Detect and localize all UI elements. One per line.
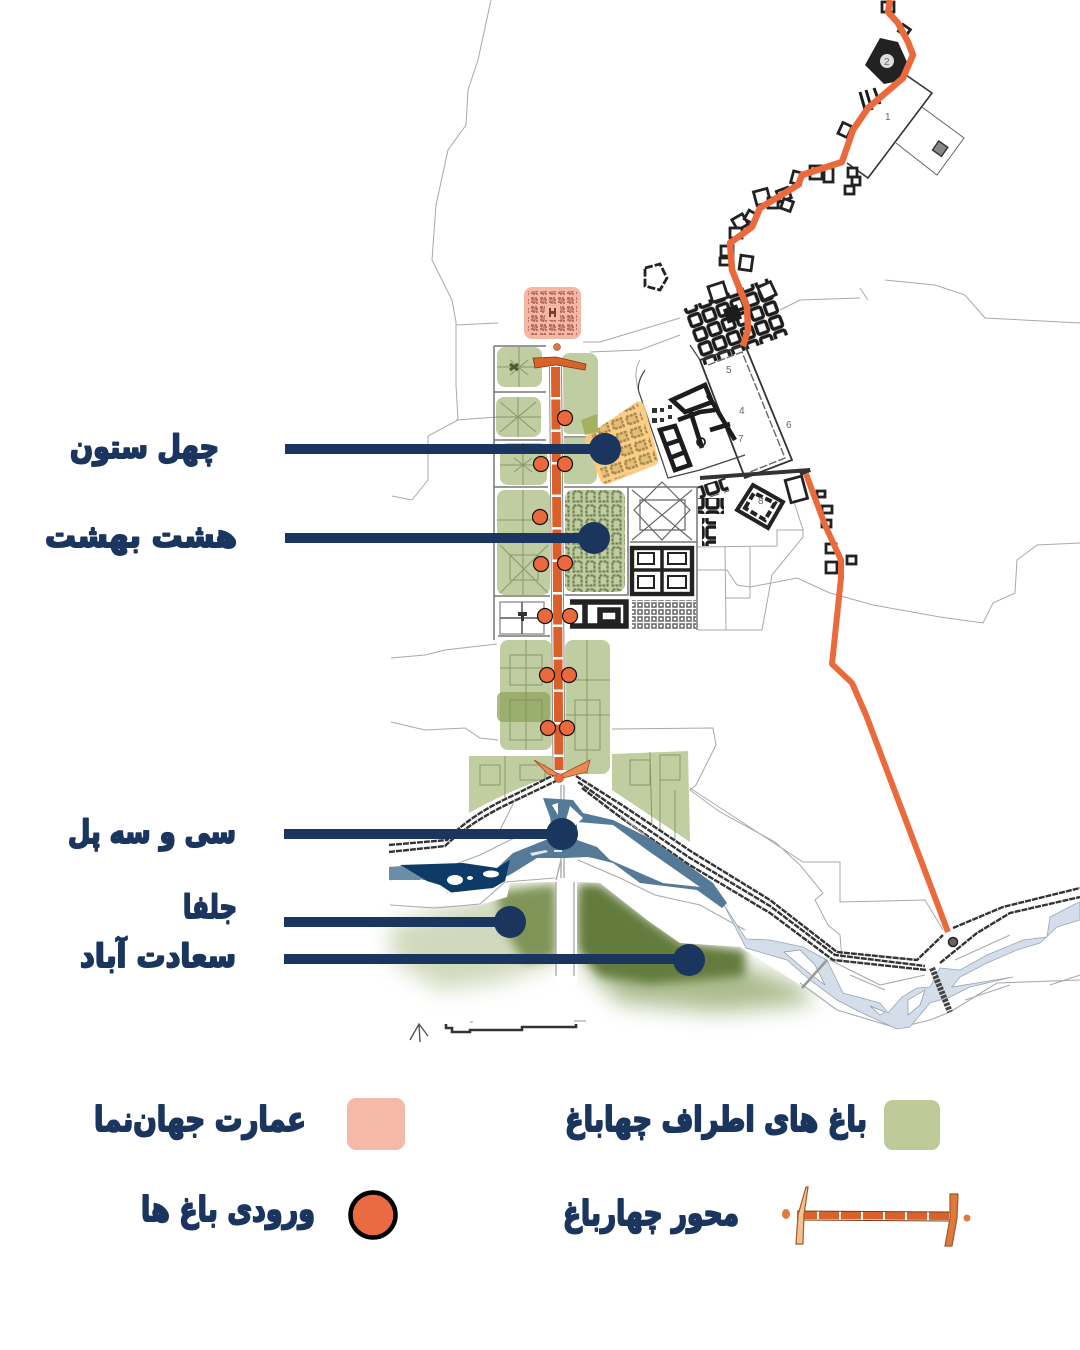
base map line work — [391, 0, 1080, 960]
legend: Jahan-Nama building — [94, 1098, 405, 1150]
embankment lines — [389, 774, 1080, 970]
route: southern orange path — [806, 474, 948, 932]
garden plan details — [480, 347, 680, 840]
river dark blue — [400, 860, 510, 893]
callout: Saadat Abad: سعادت آباد — [80, 936, 236, 975]
central road — [556, 785, 577, 985]
darker garden band — [497, 692, 550, 722]
scale bar — [446, 1021, 586, 1032]
central gardens outline work — [494, 346, 697, 640]
dense parterre of Hasht Behesht garden — [565, 490, 625, 592]
callout: Saadat Abad — [80, 936, 705, 976]
axis south terrace — [534, 760, 590, 778]
river bed white mask — [389, 777, 837, 992]
buildings upper route: 2 — [884, 57, 890, 68]
ground: Saadat Abad dark green — [578, 884, 745, 984]
callout: Chehel Sotoun — [70, 428, 621, 466]
callout: Hasht Behesht — [45, 517, 610, 555]
legend: Chaharbagh axis — [563, 1187, 970, 1246]
callout: Si-o-se-pol: سی و سه پل — [68, 813, 236, 851]
north arrow — [410, 1024, 428, 1042]
route end marker — [948, 938, 958, 946]
route: northern orange path — [730, 0, 913, 346]
legend: Jahan-Nama building: عمارت جهان‌نما — [94, 1100, 306, 1140]
palace precinct — [638, 345, 856, 573]
palace precinct: 8 — [758, 496, 764, 507]
panel: Chehel Sotoun garden (yellow) — [581, 402, 658, 484]
callout: Hasht Behesht: هشت بهشت — [45, 517, 237, 555]
palace precinct: 4 — [739, 406, 745, 417]
Chaharbagh axis — [533, 344, 590, 782]
panel: gardens around Chaharbagh — [469, 347, 690, 842]
legend: surrounding gardens: باغ های اطراف چهاباغ — [565, 1100, 867, 1140]
axis north terrace — [533, 357, 586, 370]
callout: Jolfa: جلفا — [183, 888, 237, 926]
ground: Saadat Abad pale green — [578, 890, 815, 1012]
palace precinct: 6 — [786, 420, 792, 431]
callout: Chehel Sotoun: چهل ستون — [70, 428, 219, 466]
palace precinct: 7 — [738, 434, 744, 445]
buildings upper route: 1 — [885, 112, 891, 123]
river contour lines — [390, 800, 1080, 1028]
callout: Si-o-se-pol — [68, 813, 578, 851]
buildings upper route — [645, 2, 964, 290]
legend: Chaharbagh axis: محور چهارباغ — [563, 1194, 739, 1234]
river light blue — [724, 902, 1080, 1029]
panel: Jahan-Nama building (pink) — [524, 287, 581, 339]
ground: Jolfa pale green — [390, 885, 556, 990]
ground: Jolfa dark green — [497, 884, 556, 962]
legend: garden entrance: ورودی باغ ها — [141, 1190, 315, 1230]
river mid blue channels — [497, 798, 727, 908]
garden entrances — [532, 410, 578, 736]
palace precinct: 5 — [726, 365, 732, 376]
callout: Jolfa — [183, 888, 526, 938]
river and banks — [389, 774, 1080, 1029]
town quarter grid — [683, 278, 788, 365]
